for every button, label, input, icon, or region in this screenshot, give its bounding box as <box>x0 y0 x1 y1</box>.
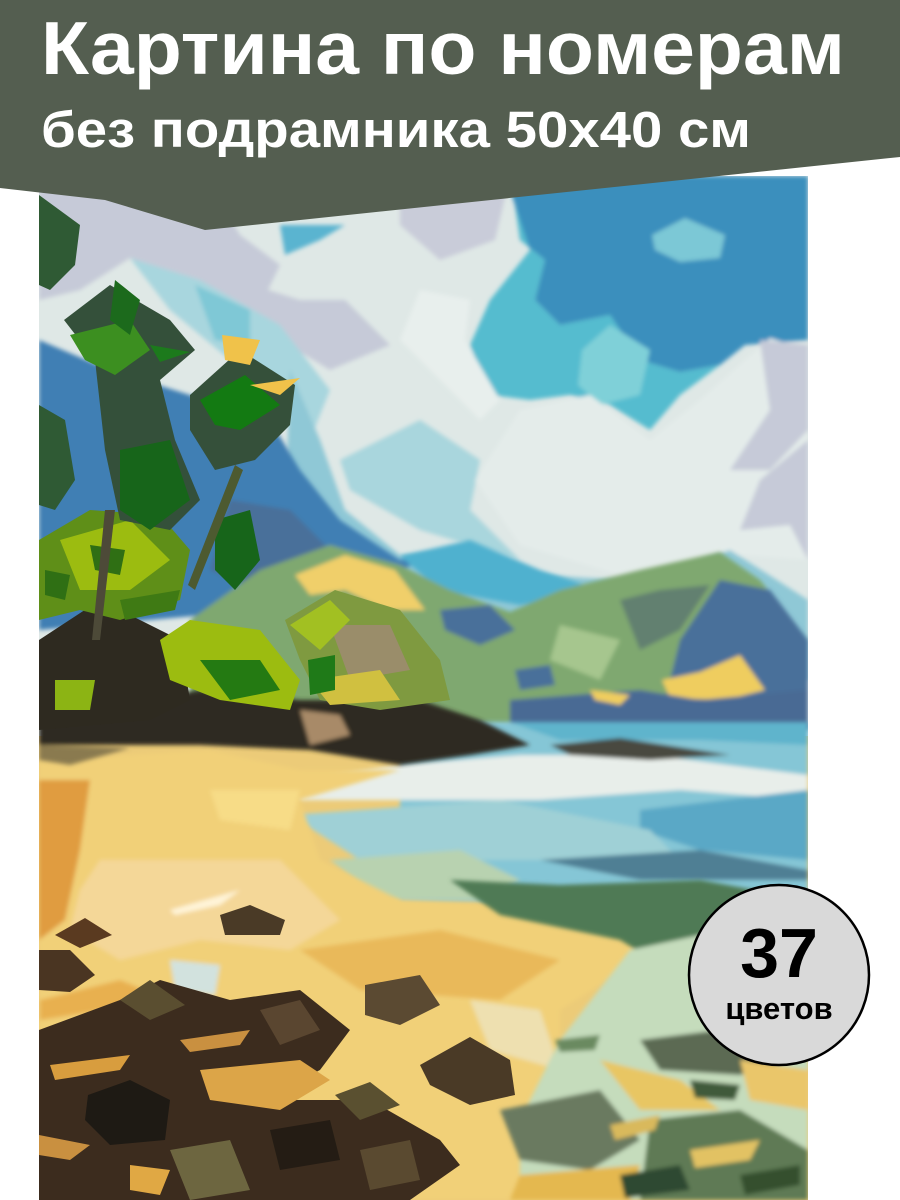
badge: 37 colours <box>689 885 869 1065</box>
surf and green foam <box>450 880 808 1200</box>
mountains <box>39 340 808 730</box>
foreground rocks <box>39 905 515 1200</box>
sea <box>240 722 808 902</box>
painting base colours <box>39 176 808 1200</box>
painting: tropical beach landscape <box>39 176 808 1200</box>
header banner <box>0 0 900 230</box>
badge: 37 colours: цветов <box>725 991 833 1026</box>
headland <box>39 690 530 765</box>
subtitle: без подрамника 50х40 см <box>41 101 751 158</box>
sand <box>39 768 558 1068</box>
palm trees and vegetation <box>39 195 450 730</box>
badge: 37 colours: 37 <box>740 914 818 992</box>
sky <box>39 176 808 680</box>
title: Картина по номерам <box>41 6 845 90</box>
